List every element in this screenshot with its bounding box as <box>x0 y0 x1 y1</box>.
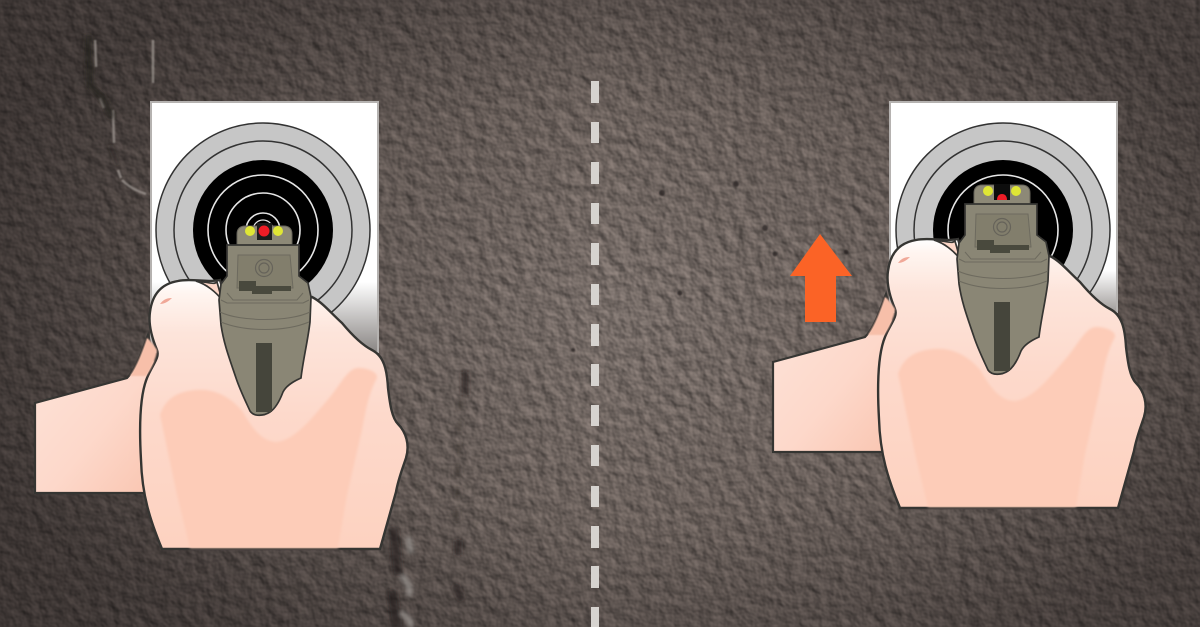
forearm <box>35 335 165 493</box>
pistol rear view <box>219 223 311 415</box>
paper target sheet <box>890 102 1117 312</box>
pistol rear view <box>957 184 1049 374</box>
sights with low front post <box>974 184 1030 204</box>
paper target sheet <box>151 102 378 352</box>
bullseye rings <box>156 123 370 337</box>
wall pits <box>571 181 848 352</box>
panel: correct sight alignment (left) <box>35 102 408 549</box>
center dashed divider <box>591 81 599 627</box>
hand and pistol shifted upward <box>773 184 1146 508</box>
bullseye rings <box>896 123 1110 337</box>
front and rear sights <box>237 223 292 245</box>
gripping hand <box>130 280 408 549</box>
gripping hand <box>868 239 1146 508</box>
upward correction arrow <box>790 234 852 322</box>
forearm <box>773 294 903 452</box>
panel: front sight too low (right) <box>773 102 1146 508</box>
